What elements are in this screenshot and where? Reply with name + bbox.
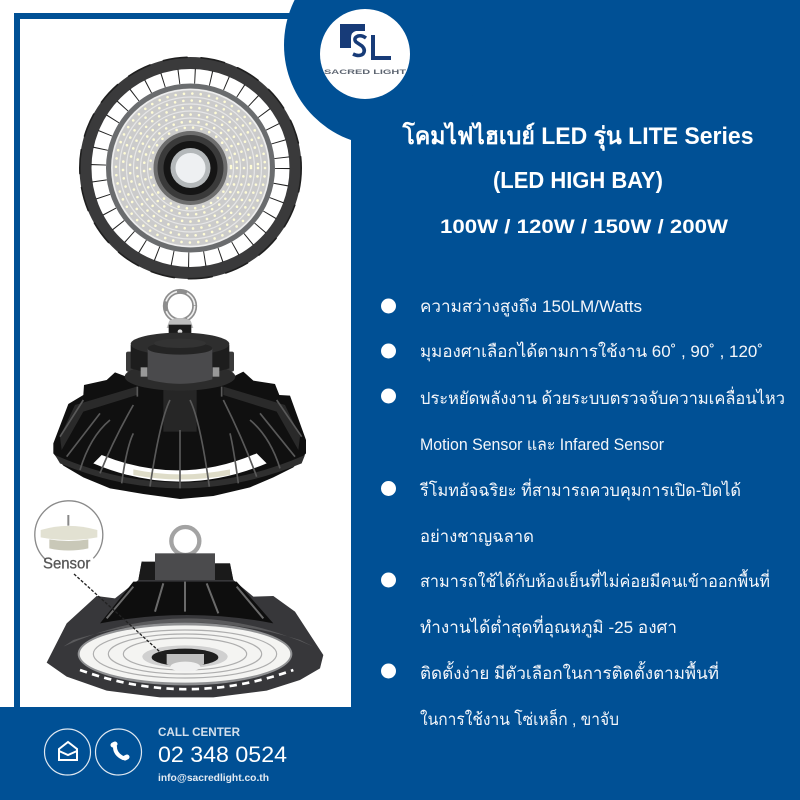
contact text: info@sacredlight.co.th <box>158 772 269 784</box>
bullet 1: ความสว่างสูงถึง 150LM/Watts <box>420 297 642 317</box>
lamp: underside with sensor <box>35 501 323 697</box>
dashed leader line <box>74 574 163 655</box>
bullet 6: ติดตั้งง่าย มีตัวเลือกในการติดตั้งตามพื้นที่ <box>420 661 719 683</box>
bullet 5: ทำงานได้ต่ำสุดที่อุณหภูมิ -25 องศา <box>420 615 677 638</box>
lens <box>78 623 292 685</box>
contact text: CALL CENTER <box>158 725 240 739</box>
logo: SACRED LIGHT <box>324 69 406 76</box>
eye bolt <box>171 527 199 555</box>
contact text <box>158 725 287 784</box>
contact text: 02 348 0524 <box>158 742 287 767</box>
bullet 4: อย่างชาญฉลาด <box>420 527 534 546</box>
title: 100W / 120W / 150W / 200W <box>440 217 728 238</box>
bullet 4 <box>381 478 741 546</box>
feature list <box>381 297 785 729</box>
sensor inset: Sensor <box>43 555 90 572</box>
icon: mail <box>44 729 90 775</box>
lamp: top view <box>80 57 301 279</box>
bullet 4: รีโมทอัจฉริยะ ที่สามารถควบคุมการเปิด-ปิดได้ <box>419 478 741 501</box>
upper body <box>47 555 323 697</box>
bullet 6 <box>381 661 719 729</box>
heat sink dome <box>53 372 306 499</box>
white slits <box>80 670 293 689</box>
bullet 5: สามารถใช้ได้กับห้องเย็นที่ไม่ค่อยมีคนเข้าออกพื้นที่ <box>420 569 770 591</box>
bullet 3: Motion Sensor และ Infared Sensor <box>420 435 664 454</box>
title <box>402 121 754 238</box>
logo <box>320 9 410 99</box>
sensor inset <box>35 501 103 572</box>
bullet 3: ประหยัดพลังงาน ด้วยระบบตรวจจับความเคลื่อนไหว <box>420 386 785 408</box>
lamp: side view <box>53 291 306 499</box>
bullet 3 <box>381 386 785 454</box>
bullet 6: ในการใช้งาน โซ่เหล็ก , ขาจับ <box>420 708 619 729</box>
bullet 5 <box>381 569 770 638</box>
title: (LED HIGH BAY) <box>493 167 663 193</box>
title: โคมไฟไฮเบย์ LED รุ่น LITE Series <box>402 121 754 152</box>
footer contact <box>44 725 287 784</box>
bullet 2: มุมองศาเลือกได้ตามการใช้งาน 60˚ , 90˚ , 120˚ <box>420 341 763 362</box>
icon: phone <box>96 729 142 775</box>
eye bolt <box>165 291 195 340</box>
motor housing <box>126 352 234 372</box>
